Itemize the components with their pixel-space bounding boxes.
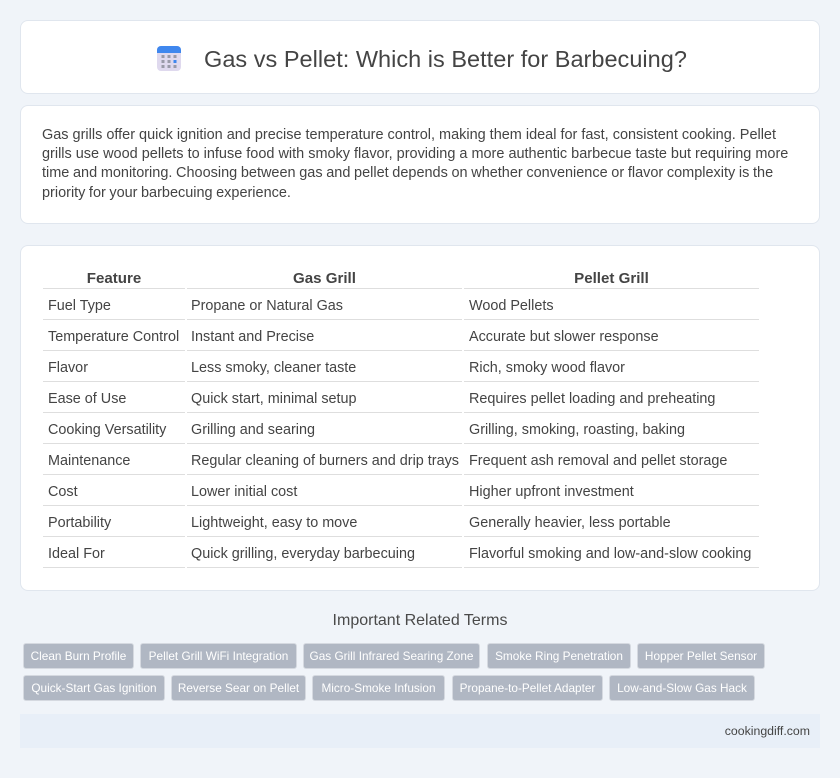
chip: Quick-Start Gas Ignition bbox=[31, 681, 157, 695]
chip bbox=[312, 675, 445, 701]
row: flavor bbox=[48, 360, 625, 376]
chip bbox=[487, 643, 631, 669]
row: cost bbox=[48, 484, 634, 500]
row: ideal for: Flavorful smoking and low-and-slow cooking bbox=[469, 546, 751, 562]
chip: Pellet Grill WiFi Integration bbox=[149, 649, 288, 663]
text block: introduction: grills use wood pellets to infuse food with smoky flavor, providing a more authentic barbecue taste but requiring more bbox=[42, 146, 788, 162]
icon: calendar bbox=[157, 46, 181, 71]
row: cooking versatility: Grilling and searing bbox=[191, 422, 315, 438]
row: ease of use: Ease of Use bbox=[48, 391, 126, 407]
row: ideal for bbox=[48, 546, 751, 562]
chip: Micro-Smoke Infusion bbox=[321, 681, 436, 695]
table header: gas grill: Gas Grill bbox=[293, 270, 356, 287]
row: ease of use: Requires pellet loading and preheating bbox=[469, 391, 715, 407]
row: temperature control: Instant and Precise bbox=[191, 329, 314, 345]
chip bbox=[303, 643, 480, 669]
row: cooking versatility: Grilling, smoking, roasting, baking bbox=[469, 422, 685, 438]
row: cost: Higher upfront investment bbox=[469, 484, 634, 500]
row: ease of use bbox=[48, 391, 715, 407]
row: cost: Lower initial cost bbox=[191, 484, 297, 500]
chip bbox=[23, 643, 134, 669]
table header: feature: Feature bbox=[87, 270, 141, 287]
row: maintenance bbox=[48, 453, 727, 469]
text block: introduction: Gas grills offer quick ignition and precise temperature control, making them ideal for fast, consistent cooking. Pellet bbox=[42, 127, 776, 143]
row: ideal for: Ideal For bbox=[48, 546, 105, 562]
chip bbox=[609, 675, 755, 701]
chip: Smoke Ring Penetration bbox=[495, 649, 623, 663]
text block: introduction bbox=[42, 127, 788, 201]
text block: introduction: priority for your barbecuing experience. bbox=[42, 185, 291, 201]
chip: Propane-to-Pellet Adapter bbox=[460, 681, 595, 695]
chip: Clean Burn Profile bbox=[31, 649, 126, 663]
chip: Reverse Sear on Pellet bbox=[178, 681, 299, 695]
footer bbox=[20, 714, 820, 748]
row: maintenance: Regular cleaning of burners and drip trays bbox=[191, 453, 459, 469]
row: ease of use: Quick start, minimal setup bbox=[191, 391, 357, 407]
row: portability: Generally heavier, less portable bbox=[469, 515, 671, 531]
chip bbox=[140, 643, 297, 669]
row: portability bbox=[48, 515, 671, 531]
panel: introduction bbox=[20, 105, 820, 224]
row: temperature control: Temperature Control bbox=[48, 329, 179, 345]
chip: Hopper Pellet Sensor bbox=[645, 649, 757, 663]
row: ideal for: Quick grilling, everyday barbecuing bbox=[191, 546, 415, 562]
row: flavor: Rich, smoky wood flavor bbox=[469, 360, 625, 376]
row: maintenance: Maintenance bbox=[48, 453, 130, 469]
chip bbox=[23, 675, 165, 701]
row: flavor: Less smoky, cleaner taste bbox=[191, 360, 356, 376]
row: temperature control bbox=[48, 329, 659, 345]
row: fuel type bbox=[48, 298, 554, 314]
related term chips bbox=[23, 643, 765, 701]
chip: Gas Grill Infrared Searing Zone bbox=[310, 649, 473, 663]
row: portability: Portability bbox=[48, 515, 111, 531]
row: temperature control: Accurate but slower response bbox=[469, 329, 659, 345]
row: cooking versatility: Cooking Versatility bbox=[48, 422, 166, 438]
chip bbox=[452, 675, 603, 701]
row: maintenance: Frequent ash removal and pellet storage bbox=[469, 453, 727, 469]
text block: introduction: time and monitoring. Choosing between gas and pellet depends on whether convenience or flavor complexity is the bbox=[42, 165, 773, 181]
table header: pellet grill: Pellet Grill bbox=[574, 270, 649, 287]
footer source: cookingdiff.com bbox=[725, 724, 810, 738]
row: cost: Cost bbox=[48, 484, 78, 500]
chip: Low-and-Slow Gas Hack bbox=[617, 681, 747, 695]
title: Gas vs Pellet: Which is Better for Barbecuing? bbox=[204, 46, 687, 72]
row: portability: Lightweight, easy to move bbox=[191, 515, 357, 531]
chip bbox=[171, 675, 306, 701]
chip bbox=[637, 643, 765, 669]
panel: comparison table bbox=[20, 245, 820, 591]
row: fuel type: Propane or Natural Gas bbox=[191, 298, 343, 314]
row: cooking versatility bbox=[48, 422, 685, 438]
heading: important related terms: Important Related Terms bbox=[333, 612, 507, 629]
row: fuel type: Fuel Type bbox=[48, 298, 111, 314]
panel: header bbox=[20, 20, 820, 94]
row: fuel type: Wood Pellets bbox=[469, 298, 554, 314]
row: flavor: Flavor bbox=[48, 360, 88, 376]
